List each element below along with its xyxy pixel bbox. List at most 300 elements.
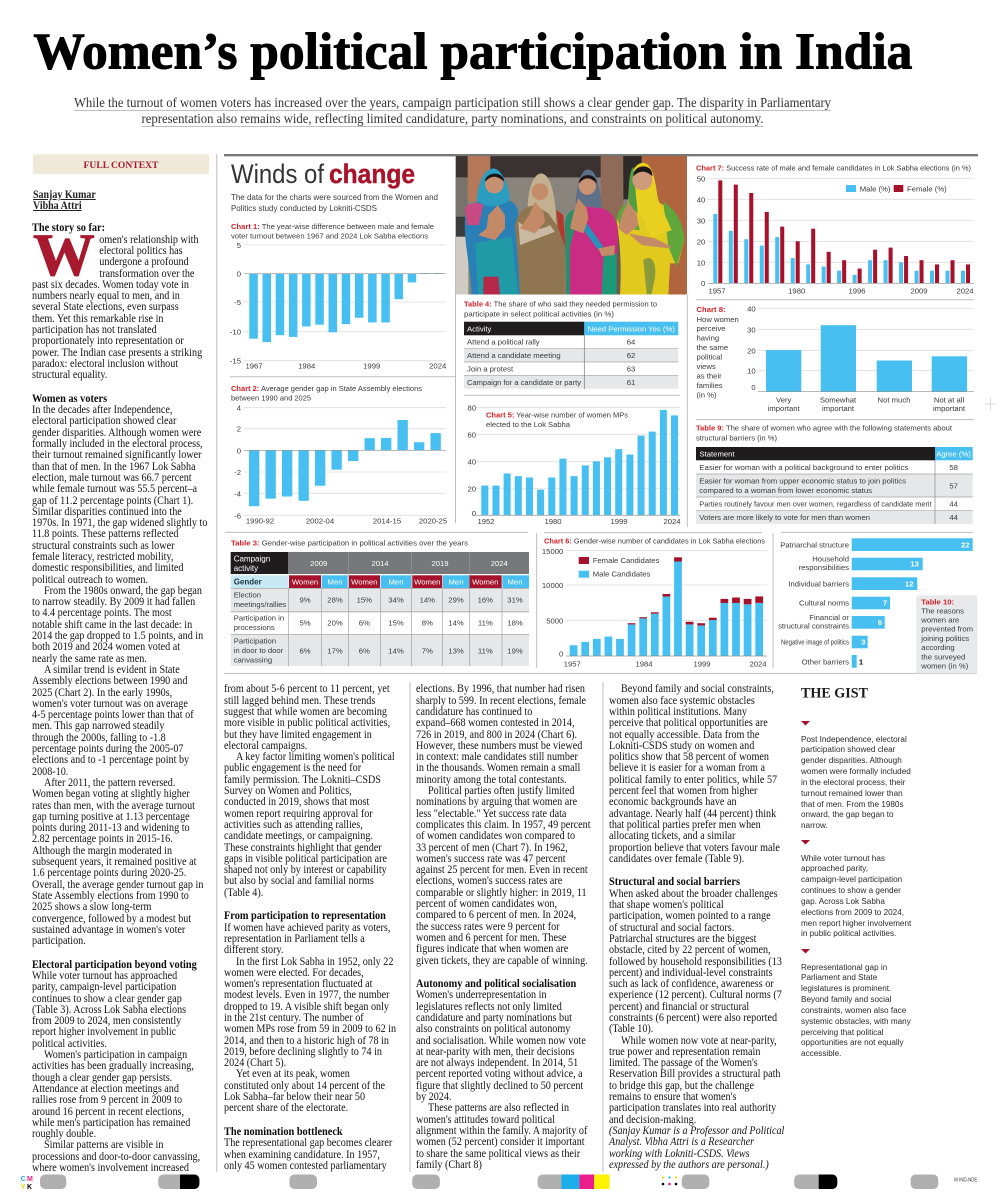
chart 2: state assembly gender gap: 4 — [237, 404, 242, 413]
article column 1: percentage points during the 2005-07 — [32, 743, 183, 755]
article column 1: than that of men. In the 1967 Lok Sabha — [32, 461, 196, 473]
article column 2: percent share of the electorate. — [224, 1102, 348, 1114]
gist point 3: Parliament and State — [801, 972, 877, 982]
table 3: campaign activity participation: canvassing — [234, 656, 272, 665]
article column 4: limited. The passage of the Women's — [609, 1057, 758, 1069]
article column 1: from 2009 to 2024, men consistently — [32, 1015, 181, 1027]
table 3: campaign activity participation: 16% — [478, 596, 493, 604]
table 3: campaign activity participation: 2014 — [371, 559, 389, 568]
chart 8: same political views as family: views — [696, 362, 716, 371]
article column 2: women report requiring approval for — [224, 808, 373, 820]
article column 4: Lokniti-CSDS study on women and — [609, 740, 754, 752]
article column 2: electoral campaigns. — [224, 740, 307, 752]
chart 2: state assembly gender gap: -2 — [234, 468, 241, 477]
table 3: campaign activity participation: Campaign — [234, 555, 270, 564]
gist point 1: that of men. From the 1980s — [801, 799, 904, 809]
gist point 2: elections from 2009 to 2024, — [801, 907, 904, 917]
chart 6: candidates by gender: 2024 — [749, 659, 767, 668]
table 10 caption box: The reasons — [921, 606, 964, 615]
article column 4: proportion believe that voters favour male — [609, 842, 780, 854]
table 9: structural barriers — [696, 424, 973, 524]
chart 6: candidates by gender: 15000 — [542, 547, 563, 556]
table 10: reasons preventing women: 6 — [878, 618, 882, 627]
gist point 3: perceiving that political — [801, 1027, 884, 1037]
article column 1: sustained advantage in women's voter — [32, 924, 185, 936]
article column 3: percent of women candidates won, — [416, 898, 557, 910]
table 3: campaign activity participation: 8% — [422, 618, 433, 628]
article column 3: figures indicate that when women are — [416, 943, 568, 955]
chart 7: success rate: Male (%) — [860, 184, 891, 194]
chart 5: women MPs: 40 — [467, 458, 476, 467]
article column 3: Political parties often justify limited — [428, 785, 574, 797]
article column 1: gap of 11.2 percentage points (Chart 1). — [32, 495, 193, 507]
gist point 2 — [801, 852, 912, 938]
chart 8: same political views as family: (in %) — [696, 391, 717, 400]
article column 4: within political institutions. Many — [609, 706, 747, 718]
article column 4: women also face systemic obstacles — [609, 695, 755, 707]
article column 3: expand–668 women contested in 2014, — [416, 717, 575, 729]
article column 1: though a clear gender gap persists. — [32, 1072, 172, 1084]
table 3: campaign activity participation: processions — [234, 623, 275, 632]
article column 2: Survey on Women and Politics, — [224, 785, 352, 797]
table 3: campaign activity participation: Gender — [234, 577, 262, 586]
chart 5: women MPs: 1999 — [610, 517, 628, 526]
article column 4: (Table 10). — [609, 1023, 653, 1035]
chart 2: state assembly gender gap — [231, 384, 447, 526]
printer marks: Y — [21, 1184, 26, 1191]
table 3: campaign activity participation: activity — [234, 564, 258, 573]
table 4: need permission: 61 — [627, 378, 635, 387]
article column 4: Patriarchal structures are the biggest — [609, 933, 757, 945]
table 10: reasons preventing women: Financial or — [809, 613, 849, 622]
article column 3: alignment within the family. A majority of — [416, 1125, 587, 1137]
table 3: campaign activity participation: 11% — [478, 646, 493, 655]
article column 4: allocating tickets, and a similar — [609, 830, 735, 842]
chart 5: women MPs: 60 — [467, 430, 476, 439]
chart 1: turnout difference: 5 — [237, 241, 241, 250]
article column 1: Attendance at election meetings and — [32, 1083, 179, 1095]
chart 2: state assembly gender gap: 2002-04 — [306, 516, 335, 526]
printer marks: C — [21, 1176, 26, 1183]
gist point 1: gender disparities. Although — [801, 755, 902, 765]
chart 7: success rate: 1996 — [848, 286, 866, 296]
table 4: need permission: 64 — [627, 338, 636, 347]
chart 1: turnout difference: 0 — [237, 270, 241, 278]
article column 4: that political parties prefer men when — [609, 819, 761, 831]
chart 1: turnout difference: 1967 — [245, 362, 263, 370]
chart 1: turnout difference: -15 — [230, 356, 241, 366]
article column 4: advantage. Nearly half (44 percent) think — [609, 808, 776, 820]
chart 8: same political views as family: 20 — [747, 346, 756, 355]
article column 1: report higher involvement in public — [32, 1026, 176, 1038]
article column 3: given tickets, they are capable of winning. — [416, 955, 588, 967]
article column 1: points during 2011-13 and widening to — [32, 822, 190, 834]
article column 1: participation has not translated — [32, 324, 157, 336]
table 10: reasons preventing women: 3 — [861, 638, 865, 647]
chart 6: candidates by gender: Male Candidates — [593, 570, 651, 578]
article column 2: From participation to representation — [224, 909, 386, 922]
article column 3: less "electable." Yet success rate data — [416, 808, 566, 820]
article column 1: men. This gap narrowed steadily — [32, 720, 164, 732]
article column 2: 2024 (Chart 5). — [224, 1057, 286, 1069]
article column 1: Similar patterns are visible in — [44, 1139, 163, 1151]
article column 2: candidate meetings, or campaigning. — [224, 830, 373, 842]
chart 8: same political views as family: 10 — [747, 367, 756, 376]
gist point 3: opportunities are not equally — [801, 1037, 904, 1047]
chart 2: state assembly gender gap: 2020-25 — [419, 516, 447, 526]
table 9: structural barriers: Statement — [700, 450, 735, 459]
article column 4: When asked about the broader challenges — [609, 888, 778, 900]
article column 1: activities has been gradually increasing, — [32, 1060, 194, 1072]
chart 6: candidates by gender: Chart 6: Gender-wise number of candidates in Lok Sabha elections — [544, 536, 765, 546]
gist point 1: narrow. — [801, 820, 828, 830]
gist point 2: men report higher involvement — [801, 918, 911, 928]
chart 2: state assembly gender gap: 0 — [237, 446, 241, 455]
table 3: campaign activity participation: Table 3: Gender-wise participation in political activities over the years — [231, 539, 468, 548]
chart 8: same political views as family: important — [822, 404, 855, 413]
article column 1: In the decades after Independence, — [32, 404, 172, 416]
article column 3: by 2024. — [416, 1091, 451, 1103]
article column 4: Beyond family and social constraints, — [621, 683, 774, 695]
table 3: campaign activity participation: Men — [449, 577, 463, 586]
article column 3: Women's underrepresentation in — [416, 989, 547, 1001]
article column 3: also constraints on political autonomy — [416, 1023, 570, 1035]
table 3: campaign activity participation: 15% — [388, 618, 404, 628]
chart 6: candidates by gender: Female Candidates — [593, 556, 660, 565]
table 3: campaign activity participation — [231, 539, 529, 666]
article column 1: paradox: electoral inclusion without — [32, 358, 178, 370]
gist point 1 — [801, 734, 911, 830]
article column 1: processions and door-to-door canvassing, — [32, 1151, 200, 1163]
article column 1: notable shift came in the last decade: in — [32, 619, 192, 631]
article column 2: These constraints highlight that gender — [224, 842, 382, 854]
article column 2: women MPs rose from 59 in 2009 to 62 in — [224, 1023, 396, 1035]
table 10 caption box — [916, 595, 977, 673]
chart 1: turnout difference — [230, 222, 447, 370]
article column 2: A key factor limiting women's political — [236, 751, 395, 763]
gist point 1: women were formally included — [801, 766, 911, 776]
article column 3: candidature has continued to — [416, 706, 532, 718]
article column 2: different story. — [224, 944, 283, 956]
table 10: reasons preventing women: structural constraints — [778, 622, 849, 630]
table 4: need permission: 62 — [627, 351, 635, 360]
chart 6: candidates by gender: 10000 — [542, 581, 563, 590]
table 9: structural barriers: Easier for woman from upper economic status to join politics — [699, 476, 906, 486]
table 4: need permission: Table 4: The share of who said they needed permission to — [464, 300, 657, 309]
chart 6: candidates by gender: 1984 — [635, 659, 653, 668]
chart 5: women MPs: 0 — [472, 509, 476, 518]
table 3: campaign activity participation: 13% — [448, 646, 464, 655]
table 3: campaign activity participation: 31% — [507, 596, 523, 604]
chart 8: same political views as family: Chart 8: — [696, 305, 726, 314]
article column 2: in the 21st century. The number of — [224, 1012, 364, 1024]
table 3: campaign activity participation: 11% — [478, 618, 493, 628]
article column 1: Electoral participation beyond voting — [32, 958, 197, 971]
chart 8: same political views as family: Very — [776, 396, 792, 404]
article column 1: where women's involvement increased — [32, 1162, 189, 1174]
article column 1: 2025 (Chart 2). In the early 1990s, — [32, 687, 172, 699]
table 4: need permission: participate in select political activities (in %) — [464, 309, 614, 318]
article column 1: After 2011, the pattern reversed. — [44, 777, 175, 789]
table 10: reasons preventing women: Other barriers — [802, 658, 849, 666]
article column 4: experience (12 percent). Cultural norms (7 — [609, 989, 782, 1001]
chart 8: same political views as family: Not much — [878, 396, 910, 404]
article column 1: Similar disparities continued into the — [32, 506, 182, 518]
article column 3: against 25 percent for men. Even in recent — [416, 864, 588, 876]
article column 2: public engagement is the need for — [224, 762, 361, 774]
article column 2: (Table 4). — [224, 887, 263, 899]
article column 2: still lagged behind men. These trends — [224, 695, 375, 707]
article column 4: obstacle, cited by 22 percent of women, — [609, 944, 771, 956]
chart 7: success rate: 1957 — [708, 286, 726, 296]
table 10: reasons preventing women: Negative image of politics — [781, 638, 849, 647]
table 3: campaign activity participation: 29% — [448, 596, 464, 604]
chart 6: candidates by gender: 0 — [559, 650, 563, 658]
printer marks: M — [27, 1176, 33, 1183]
chart 8: same political views as family — [696, 304, 974, 413]
article column 1: Although the margin moderated in — [32, 845, 172, 857]
article column 4: to bridge this gap, but the challenge — [609, 1080, 754, 1092]
article column 1: rallies rose from 9 percent in 2009 to — [32, 1094, 182, 1106]
table 10 caption box: women (in %) — [920, 661, 969, 670]
article column 2: conducted in 2019, shows that most — [224, 796, 369, 808]
article column 4: remains to ensure that women's — [609, 1091, 736, 1103]
table 3: campaign activity participation: 18% — [507, 618, 523, 628]
label: full context: FULL CONTEXT — [84, 160, 159, 171]
chart 8: same political views as family: having — [696, 334, 719, 343]
article column 4: participation translates into real authority — [609, 1102, 776, 1114]
article column 3: women's attitudes toward political — [416, 1114, 555, 1126]
chart 6: candidates by gender — [542, 536, 767, 668]
chart 1: turnout difference: -5 — [234, 298, 241, 307]
article column 3: nominations by arguing that women are — [416, 796, 577, 808]
table 3: campaign activity participation: 2024 — [491, 559, 509, 568]
article column 1: while men's participation has remained — [32, 1117, 190, 1129]
article column 2: activities such as attending rallies, — [224, 819, 363, 831]
article column 1: election, male turnout was 66.7 percent — [32, 472, 192, 484]
chart 1: turnout difference: voter turnout between 1967 and 2024 Lok Sabha elections — [231, 232, 428, 240]
table 3: campaign activity participation: Women — [472, 577, 498, 586]
table 4: need permission: Join a protest — [467, 364, 514, 374]
article column 2: If women have achieved parity as voters, — [224, 922, 390, 934]
table 3: campaign activity participation: Women — [414, 577, 440, 586]
article column 3: women and 6 percent for men. These — [416, 932, 566, 944]
chart 7: success rate: 2024 — [956, 286, 974, 296]
article column 1: 1970s. In 1971, the gap widened slightly to — [32, 517, 207, 529]
article column 2: The nomination bottleneck — [224, 1125, 343, 1138]
gist point 3: systemic obstacles, with many — [801, 1016, 911, 1026]
chart 2: state assembly gender gap: between 1990 and 2025 — [231, 394, 311, 402]
table 3: campaign activity participation: 6% — [299, 646, 311, 655]
article column 1: 2014 the gap dropped to 1.5 points, and in — [32, 630, 203, 642]
article column 3: However, these numbers must be viewed — [416, 740, 582, 752]
article column 3: comparable or slightly higher: in 2019, 11 — [416, 887, 587, 899]
table 9: structural barriers: Agree (%) — [936, 450, 971, 459]
article column 4: followed by household responsibilities (13 — [609, 956, 782, 968]
article column 1: 2008-10. — [32, 766, 68, 778]
article column 3: are not always independent. In 2014, 51 — [416, 1057, 578, 1069]
article column 4: Structural and social barriers — [609, 875, 740, 888]
article column 1: both 2019 and 2024 women voted at — [32, 641, 180, 653]
chart 8: same political views as family: Somewhat — [820, 396, 857, 404]
chart 5: women MPs: 1980 — [544, 517, 562, 526]
table 10: reasons preventing women: responsibilities — [799, 563, 849, 572]
article column 2: but they have limited engagement in — [224, 729, 372, 741]
table 3: campaign activity participation: 6% — [359, 646, 370, 655]
table 9: structural barriers: structural barriers (in %) — [696, 433, 777, 442]
table 9: structural barriers: Easier for woman with a political background to enter politics — [699, 463, 908, 472]
article column 2: In the first Lok Sabha in 1952, only 22 — [236, 956, 393, 968]
article column 3: complicates this claim. In 1957, 49 percent — [416, 819, 591, 831]
article column 2: representation in Parliament tells a — [224, 933, 365, 945]
article column 1: numbers nearly equal to men, and in — [32, 290, 180, 302]
article column 4: percent) and financial or structural — [609, 1001, 749, 1013]
label: full context — [33, 154, 209, 174]
article column 4: percent feel that women from higher — [609, 785, 757, 797]
chart 7: success rate: 30 — [697, 216, 705, 225]
article column 2: from about 5-6 percent to 11 percent, yet — [224, 683, 390, 695]
subtitle — [74, 95, 831, 126]
article column 4: political family to enter politics, while 57 — [609, 774, 777, 786]
article column 4: participation, women pointed to a range — [609, 910, 771, 922]
printer marks: M IND-NDE — [954, 1178, 978, 1184]
chart 1: turnout difference: 2024 — [429, 362, 447, 370]
table 3: campaign activity participation: 20% — [327, 618, 343, 628]
icon: gist marker 2 — [801, 840, 810, 844]
article column 1: rates than men, with the average turnout — [32, 800, 195, 812]
article column 2: suggest that while women are becoming — [224, 706, 387, 718]
chart 5: women MPs — [467, 403, 681, 526]
article column 4: candidates over female (Table 9). — [609, 853, 744, 865]
article column 3: minority among the total contestants. — [416, 774, 567, 786]
chart 5: women MPs: 20 — [467, 485, 476, 494]
chart 7: success rate: 20 — [697, 237, 705, 246]
article column 1: The story so far: — [32, 221, 105, 234]
table 10: reasons preventing women: 1 — [859, 658, 864, 666]
table 4: need permission: Attend a political rally — [467, 338, 540, 347]
table 4: need permission: Activity — [467, 324, 492, 334]
table 3: campaign activity participation: Men — [389, 577, 403, 586]
table 10 caption box: joining politics — [920, 634, 969, 643]
article column 1: undergone a profound — [99, 256, 189, 268]
article column 1: domestic responsibilities, and limited — [32, 562, 183, 574]
article column 3: in the thousands. Women remain a small — [416, 762, 580, 774]
chart 8: same political views as family: 0 — [751, 383, 756, 392]
article column 2: The representational gap becomes clearer — [224, 1137, 392, 1149]
table 9: structural barriers: Table 9: The share of women who agree with the following statements about — [696, 424, 953, 433]
article column 1: structural equality. — [32, 369, 107, 381]
chart 5: women MPs: 1952 — [477, 517, 495, 526]
article column 1: A similar trend is evident in State — [44, 664, 180, 676]
heading: winds of change: change — [329, 159, 415, 189]
article column 1: electoral politics has — [99, 245, 183, 257]
article column 1: continues to show a clear gender gap — [32, 993, 182, 1005]
chart 7: success rate: 0 — [701, 279, 705, 288]
article column 2: 2014, and then to a historic high of 78 in — [224, 1035, 389, 1047]
table 4: need permission: Campaign for a candidate or party — [467, 378, 581, 387]
article column 3: compared to 6 percent of men. In 2024, — [416, 909, 576, 921]
table 3: campaign activity participation: 14% — [420, 596, 435, 604]
chart 8: same political views as family: as their — [696, 372, 722, 381]
article column 1: structural constraints such as lower — [32, 540, 174, 552]
table 10: reasons preventing women — [778, 538, 977, 673]
printer marks: K — [27, 1184, 32, 1191]
article column 1: Women as voters — [32, 392, 107, 405]
article column 1: 4-5 percentage points lower than that of — [32, 709, 194, 721]
table 9: structural barriers: compared to a woman from lower economic status — [699, 486, 872, 495]
chart 8: same political views as family: families — [696, 381, 723, 390]
article column 3: 33 percent of men (Chart 7). In 1962, — [416, 842, 568, 854]
article column 1: elections and to -1 percentage point by — [32, 754, 189, 766]
table 10: reasons preventing women: Household — [812, 554, 849, 564]
article column 4 — [608, 683, 784, 1171]
article column 1: to 4.4 percentage points. The most — [32, 607, 172, 619]
table 3: campaign activity participation: 19% — [507, 646, 523, 655]
chart 5: women MPs: 80 — [467, 403, 476, 412]
table 3: campaign activity participation: 6% — [359, 618, 370, 628]
chart 1: turnout difference: -10 — [230, 328, 241, 336]
table 3: campaign activity participation: Women — [292, 577, 318, 586]
chart 8: same political views as family: 40 — [747, 304, 756, 313]
table 3: campaign activity participation: Men — [508, 577, 522, 586]
article column 3: figure that slightly declined to 50 percent — [416, 1080, 583, 1092]
article column 3: and socialisation. While women now vote — [416, 1035, 586, 1047]
article column 2: modest levels. Even in 1977, the number — [224, 989, 390, 1001]
article column 3: women (52 percent) consider it important — [416, 1136, 585, 1148]
article column 1: 11.8 points. These patterns reflected — [32, 528, 178, 540]
gist point 3: Beyond family and social — [801, 994, 891, 1004]
gist point 2: approached parity, — [801, 863, 868, 873]
table 3: campaign activity participation: 5% — [299, 618, 311, 628]
byline: Sanjay Kumar — [33, 189, 96, 201]
gist point 3: Representational gap in — [801, 962, 887, 972]
byline — [33, 189, 96, 212]
article column 2: more visible in public political activities, — [224, 717, 390, 729]
article column 1: political activities. — [32, 1038, 107, 1050]
article column 1: 2.82 percentage points in 2015-16. — [32, 833, 173, 845]
table 10: reasons preventing women: Individual barriers — [788, 580, 849, 588]
table 10: reasons preventing women: 7 — [883, 599, 887, 608]
article column 1: proportionately into representation or — [32, 335, 184, 347]
article column 3: of women candidates won compared to — [416, 830, 575, 842]
gist point 3: legislatures is prominent. — [801, 983, 891, 993]
article column 3: These patterns are also reflected in — [428, 1102, 569, 1114]
chart 8: same political views as family: important — [768, 404, 801, 413]
chart 8: same political views as family: important — [933, 404, 966, 413]
article column 4: Analyst. Vibha Attri is a Researcher — [609, 1136, 754, 1148]
table 3: campaign activity participation: Women — [351, 577, 377, 586]
table 10: reasons preventing women: 12 — [905, 580, 914, 588]
article column 3: to share the same political views as their — [416, 1148, 580, 1160]
chart 5: women MPs: 2024 — [663, 517, 681, 526]
article column 1: around 16 percent in recent elections, — [32, 1106, 184, 1118]
article column 4: expressed by the authors are personal.) — [609, 1159, 769, 1171]
chart 7: success rate: Female (%) — [907, 184, 947, 194]
table 10 caption box: prevented from — [921, 625, 973, 634]
article column 1: political outreach to women. — [32, 574, 148, 586]
article column 3: legislatures reflects not only limited — [416, 1001, 562, 1013]
table 10: reasons preventing women: 22 — [961, 540, 970, 550]
article column 4: not equally accessible. Data from the — [609, 729, 759, 741]
article column 3: candidature and party nominations but — [416, 1012, 572, 1024]
article column 3: 726 in 2019, and 800 in 2024 (Chart 6). — [416, 729, 577, 741]
table 4: need permission — [464, 300, 678, 389]
article column 2 — [224, 683, 396, 1172]
gist point 3: accessible. — [801, 1048, 841, 1058]
table 3: campaign activity participation: 2009 — [310, 559, 327, 568]
gist point 2: campaign-level participation — [801, 874, 902, 884]
chart 8: same political views as family: 30 — [747, 325, 756, 334]
